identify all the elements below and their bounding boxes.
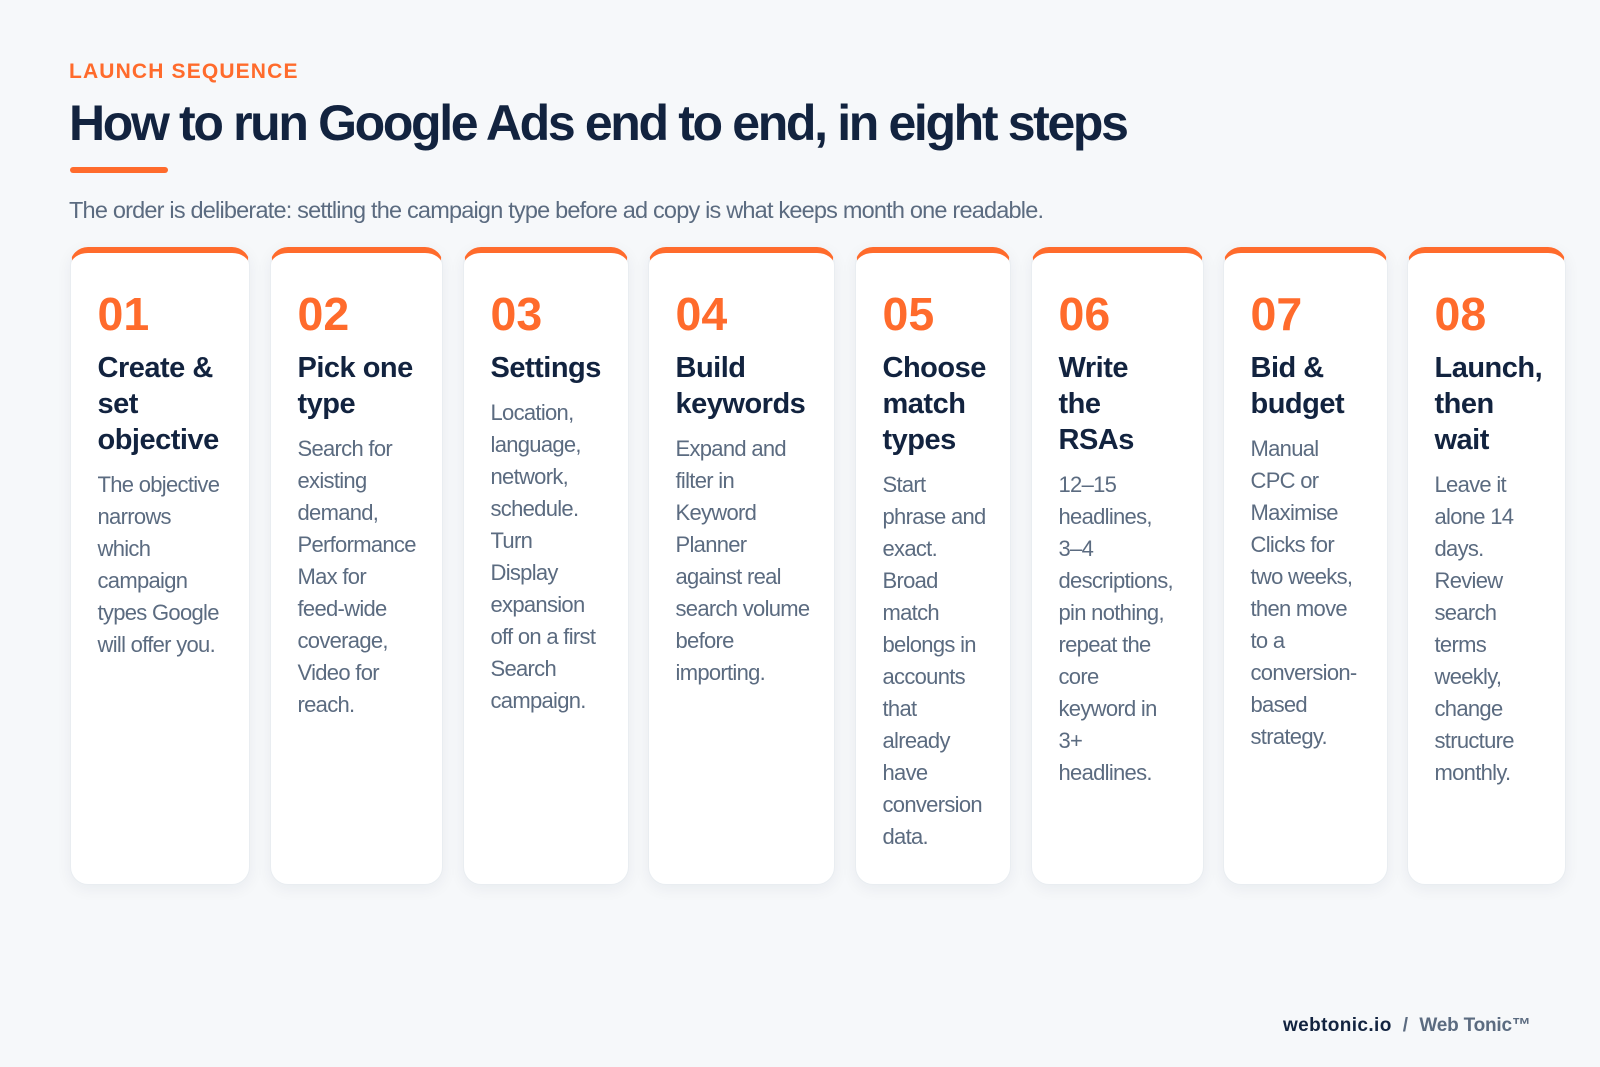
panel: step 05: belongs in [882,632,976,657]
panel: step 08: wait [1434,424,1489,456]
panel: step 03: Location, [490,400,574,425]
panel: step 05: exact. [882,536,937,561]
panel: step 01: narrows [98,504,171,529]
panel: step 05: accounts [882,664,965,689]
panel: step 03: network, [490,464,568,489]
eyebrow: LAUNCH SEQUENCE [69,60,299,83]
panel: step 07: then move [1250,596,1347,621]
panel: step 07: Bid & [1250,352,1324,384]
panel: step 06: 06 [1058,288,1110,340]
panel: step 06: descriptions, [1058,568,1173,593]
panel: step 04: 04 [676,288,727,340]
title underline [70,167,168,173]
panel: step 03: Turn [490,528,532,553]
panel: step 02: Max for [298,564,366,589]
panel: step 03: language, [490,432,581,457]
panel: step 01: 01 [98,288,149,340]
panel: step 05: types [882,424,956,456]
panel: step 07: based [1250,692,1307,717]
panel: step 02: Search for [298,436,392,461]
panel: step 08 [1407,247,1566,885]
panel: step 05 [855,247,1011,885]
subtitle: The order is deliberate: settling the campaign type before ad copy is what keeps month one readable. [69,197,1043,223]
panel: step 05: already [882,728,950,753]
panel: step 04: Expand and [676,436,786,461]
title: How to run Google Ads end to end, in eight steps [69,95,1127,151]
panel: step 01: Create & [98,352,213,384]
panel: step 07 [1223,247,1388,885]
panel: step 04 [648,247,835,885]
panel: step 03: expansion [490,592,584,617]
panel: step 08: Review [1434,568,1502,593]
panel: step 05: Broad [882,568,938,593]
panel: step 04: importing. [676,660,765,685]
panel: step 06: headlines, [1058,504,1152,529]
panel: step 06: pin nothing, [1058,600,1164,625]
panel: step 07: CPC or [1250,468,1318,493]
panel: step 05: match [882,600,939,625]
panel: step 02: coverage, [298,628,388,653]
panel: step 08: terms [1434,632,1486,657]
panel: step 06: headlines. [1058,760,1152,785]
panel: step 04: Keyword [676,500,756,525]
panel: step 02: 02 [298,288,349,340]
panel: step 06: repeat the [1058,632,1151,657]
panel: step 06: 3+ [1058,728,1082,753]
panel: step 06: core [1058,664,1098,689]
panel: step 02: reach. [298,692,354,717]
panel: step 08: days. [1434,536,1484,561]
panel: step 08: weekly, [1434,664,1501,689]
panel: step 01: which [98,536,150,561]
panel: step 03: 03 [490,288,542,340]
panel: step 07: two weeks, [1250,564,1352,589]
footer: webtonic.io / Web Tonic™ [1283,1015,1531,1036]
panel: step 08: search [1434,600,1496,625]
panel: step 08: monthly. [1434,760,1510,785]
panel: step 01: set [98,388,138,420]
panel: step 03: Settings [490,352,601,384]
panel: step 01: objective [98,424,219,456]
panel: step 06: 3–4 [1058,536,1093,561]
panel: step 08: then [1434,388,1494,420]
panel: step 05: conversion [882,792,982,817]
panel: step 01: campaign [98,568,187,593]
panel: step 02: existing [298,468,366,493]
panel: step 05: Start [882,472,925,497]
panel: step 08: 08 [1434,288,1486,340]
panel: step 06: Write [1058,352,1128,384]
panel: step 07: budget [1250,388,1344,420]
panel: step 02: Video for [298,660,379,685]
panel: step 05: that [882,696,916,721]
panel: step 05: phrase and [882,504,986,529]
panel: step 08: structure [1434,728,1514,753]
panel: step 07: Clicks for [1250,532,1334,557]
panel: step 05: 05 [882,288,934,340]
panel: step 05: have [882,760,927,785]
panel: step 02: type [298,388,355,420]
panel: step 04: filter in [676,468,734,493]
panel: step 08: change [1434,696,1502,721]
panel: step 08: alone 14 [1434,504,1513,529]
panel: step 06: 12–15 [1058,472,1116,497]
panel: step 07: Manual [1250,436,1318,461]
panel: step 05: Choose [882,352,986,384]
panel: step 03: campaign. [490,688,586,713]
panel: step 08: Launch, [1434,352,1542,384]
panel: step 01: The objective [98,472,219,497]
panel: step 04: keywords [676,388,805,420]
panel: step 02 [270,247,443,885]
panel: step 02: demand, [298,500,378,525]
panel: step 04: against real [676,564,781,589]
panel: step 07: Maximise [1250,500,1338,525]
panel: step 03: Search [490,656,556,681]
panel: step 07: strategy. [1250,724,1327,749]
panel: step 03: Display [490,560,558,585]
panel: step 02: Pick one [298,352,413,384]
panel: step 06: the [1058,388,1100,420]
panel: step 03: off on a first [490,624,595,649]
panel: step 08: Leave it [1434,472,1506,497]
panel: step 03 [463,247,629,885]
panel: step 06 [1031,247,1204,885]
panel: step 04: search volume [676,596,809,621]
panel: step 02: Performance [298,532,416,557]
panel: step 07: conversion- [1250,660,1357,685]
panel: step 05: match [882,388,965,420]
panel: step 01 [70,247,250,885]
panel: step 01: types Google [98,600,219,625]
panel: step 06: keyword in [1058,696,1157,721]
panel: step 05: data. [882,824,928,849]
panel: step 01: will offer you. [98,632,215,657]
panel: step 02: feed-wide [298,596,387,621]
panel: step 03: schedule. [490,496,578,521]
panel: step 06: RSAs [1058,424,1134,456]
panel: step 04: Planner [676,532,746,557]
panel: step 07: 07 [1250,288,1302,340]
panel: step 04: before [676,628,734,653]
panel: step 04: Build [676,352,746,384]
panel: step 07: to a [1250,628,1284,653]
